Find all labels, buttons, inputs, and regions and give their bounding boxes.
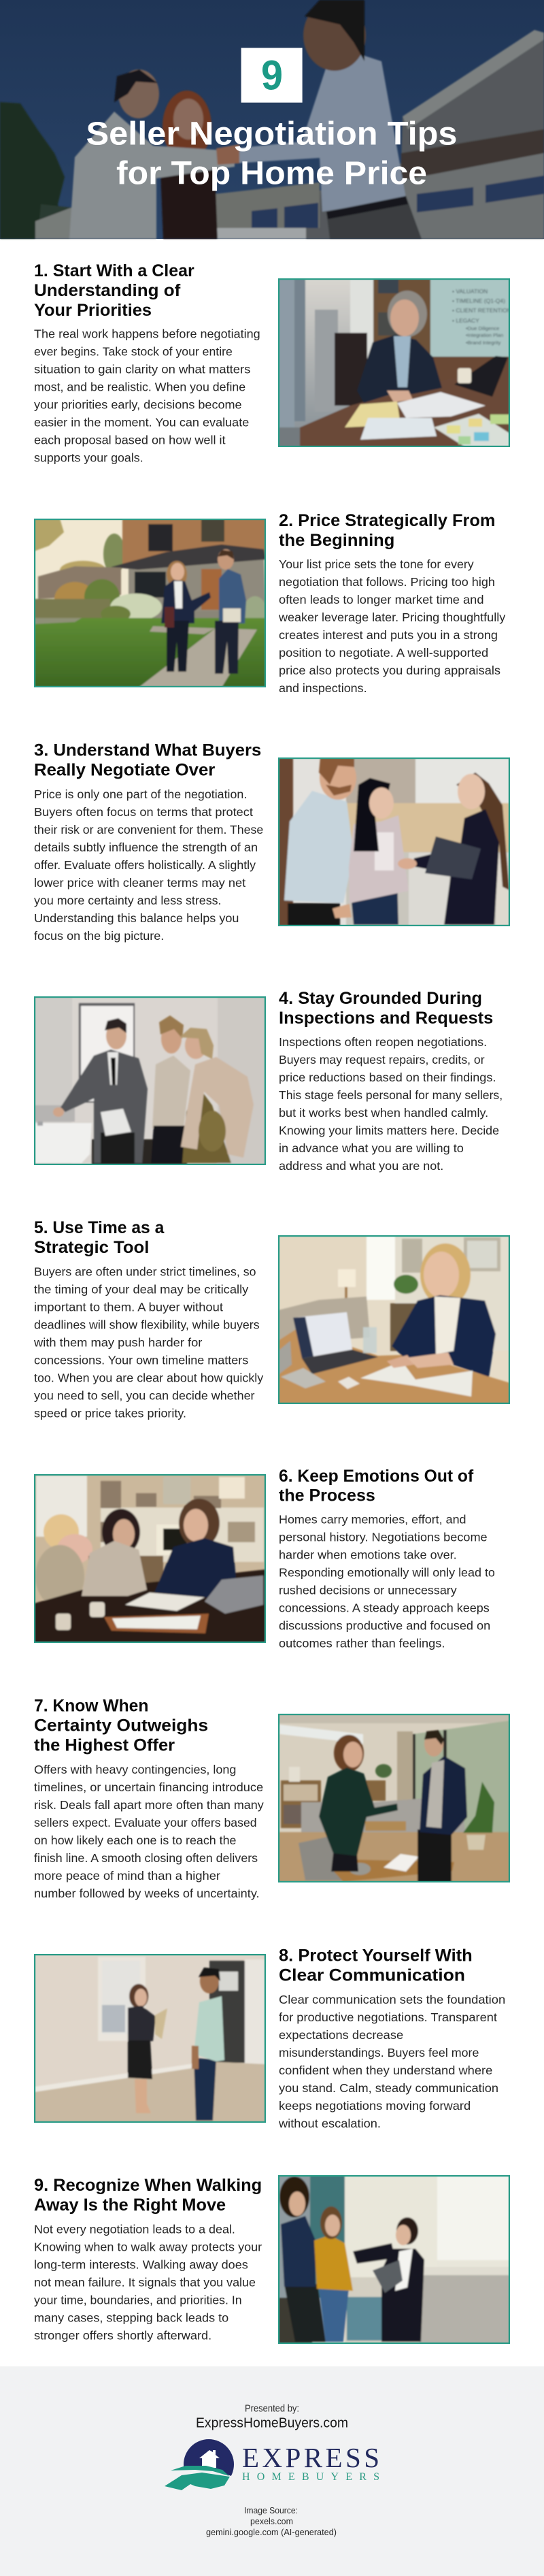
- body text: tip 5: too. When you are clear about how quickly: [34, 1371, 263, 1385]
- body text: tip 3: Buyers often focus on terms that protect: [34, 805, 253, 819]
- body text: tip 6: Responding emotionally will only lead to: [279, 1566, 495, 1580]
- body text: tip 7: risk. Deals fall apart more often than many: [34, 1798, 264, 1812]
- heading: tip 2: the Beginning: [279, 531, 394, 550]
- heading: tip 7: the Highest Offer: [34, 1735, 175, 1755]
- heading: tip 7: [34, 1696, 208, 1755]
- heading: tip 3: Really Negotiate Over: [34, 761, 216, 780]
- body text: tip 3: lower price with cleaner terms may net: [34, 876, 245, 890]
- photo: woman writing at office desk: •Brand Integrity: [466, 340, 501, 346]
- body text: tip 2: weaker leverage later. Pricing thoughtfully: [278, 610, 505, 624]
- body text: tip 2: creates interest and puts you in a strong: [279, 628, 498, 642]
- body text: tip 3: you more certainty and less stress.: [34, 894, 222, 907]
- body text: tip 3: [34, 787, 263, 943]
- body text: tip 6: rushed decisions or unnecessary: [279, 1584, 457, 1597]
- photo: woman writing at office desk: • LEGACY: [452, 317, 479, 324]
- body text: tip 8: Clear communication sets the foundation: [279, 1993, 505, 2006]
- body text: tip 4: Knowing your limits matters here. Decide: [279, 1124, 499, 1137]
- body text: tip 7: Offers with heavy contingencies, long: [34, 1763, 236, 1776]
- heading: tip 3: [34, 740, 261, 780]
- panel: tip 9: [34, 2175, 510, 2344]
- body text: tip 8: misunderstandings. Buyers feel more: [279, 2046, 479, 2059]
- body text: tip 8: you stand. Calm, steady communication: [279, 2081, 498, 2095]
- body text: tip 9: your time, boundaries, and priorities. In: [34, 2294, 242, 2307]
- body text: tip 5: you need to sell, you can decide whether: [34, 1389, 255, 1403]
- panel: tip 5: [33, 1218, 510, 1420]
- heading: tip 4: 4. Stay Grounded During: [279, 989, 482, 1008]
- heading: tip 1: 1. Start With a Clear: [34, 261, 194, 280]
- photo: woman and man talking in a living room: [278, 1714, 510, 1882]
- heading: tip 4: [279, 989, 493, 1028]
- heading: tip 6: [279, 1467, 474, 1505]
- photo: woman writing at office desk: •Integration Plan: [466, 332, 503, 338]
- body text: tip 7: timelines, or uncertain financing introduce: [34, 1780, 263, 1794]
- body text: tip 4: This stage feels personal for many sellers,: [279, 1088, 503, 1102]
- heading: tip 9: 9. Recognize When Walking: [34, 2176, 262, 2195]
- body text: tip 5: Buyers are often under strict timelines, so: [34, 1265, 256, 1279]
- number badge: 9: [261, 52, 283, 98]
- body text: tip 8: for productive negotiations. Transparent: [279, 2010, 497, 2024]
- logo: Express HomeBuyers: [163, 2439, 379, 2496]
- photo: couple shaking hands with agent in kitchen: [278, 757, 510, 926]
- body text: tip 6: discussions productive and focused on: [279, 1619, 490, 1633]
- heading: tip 5: Strategic Tool: [34, 1238, 149, 1257]
- image sources: pexels.com: [250, 2517, 293, 2526]
- photo: woman writing at office desk: • TIMELINE (Q1-Q4): [452, 297, 505, 304]
- body text: tip 8: expectations decrease: [279, 2028, 403, 2042]
- heading: tip 3: 3. Understand What Buyers: [34, 740, 261, 760]
- presented by: ExpressHomeBuyers.com: [196, 2416, 348, 2431]
- body text: tip 5: concessions. Your own timeline matters: [34, 1354, 249, 1367]
- footer panel: [0, 2366, 544, 2576]
- heading: tip 2: 2. Price Strategically From: [279, 511, 495, 530]
- body text: tip 1: [34, 327, 260, 465]
- body text: tip 9: not mean failure. It signals that you value: [34, 2276, 256, 2289]
- photo: agent with clipboard and client in empty room: [34, 1954, 266, 2123]
- body text: tip 3: Price is only one part of the negotiation.: [34, 787, 247, 801]
- body text: tip 3: focus on the big picture.: [34, 929, 164, 943]
- heading: tip 8: [279, 1946, 473, 1985]
- body text: tip 8: [278, 1993, 505, 2130]
- title: Seller Negotiation Tips: [86, 116, 457, 152]
- body text: tip 1: The real work happens before negotiating: [34, 327, 260, 341]
- body text: tip 2: [278, 557, 505, 695]
- body text: tip 7: sellers expect. Evaluate your offers based: [34, 1816, 257, 1829]
- body text: tip 5: [33, 1265, 263, 1420]
- heading: tip 4: Inspections and Requests: [279, 1009, 493, 1028]
- body text: tip 7: finish line. A smooth closing often delivers: [34, 1851, 258, 1865]
- body text: tip 7: number followed by weeks of uncertainty.: [34, 1887, 260, 1900]
- body text: tip 1: each proposal based on how well it: [34, 434, 226, 447]
- logo: Express HomeBuyers: HOMEBUYERS: [242, 2471, 379, 2483]
- hero photo: agent shaking hands with couple: [0, 0, 544, 239]
- body text: tip 8: without escalation.: [278, 2117, 381, 2130]
- body text: tip 4: Buyers may request repairs, credits, or: [279, 1053, 485, 1066]
- title: for Top Home Price: [116, 156, 427, 192]
- heading: tip 5: [34, 1218, 165, 1257]
- body text: tip 4: Inspections often reopen negotiations.: [279, 1035, 487, 1049]
- body text: tip 1: supports your goals.: [34, 451, 143, 465]
- photo: two women reviewing documents at dining table: [34, 1474, 266, 1643]
- title: [86, 116, 457, 192]
- panel: tip 1: [34, 261, 511, 465]
- photo: couple with agent holding clipboard: [278, 2175, 510, 2344]
- number badge: [241, 48, 303, 103]
- body text: tip 9: stronger offers shortly afterward.: [34, 2329, 211, 2343]
- body text: tip 2: often leads to longer market time and: [279, 593, 484, 606]
- body text: tip 9: [34, 2223, 262, 2343]
- heading: tip 1: Your Priorities: [34, 301, 152, 320]
- body text: tip 8: keeps negotiations moving forward: [279, 2099, 471, 2113]
- image sources: gemini.google.com (AI-generated): [206, 2528, 337, 2537]
- body text: tip 4: [279, 1035, 503, 1173]
- body text: tip 6: personal history. Negotiations become: [279, 1531, 488, 1544]
- body text: tip 7: more peace of mind than a higher: [34, 1869, 220, 1882]
- body text: tip 6: concessions. A steady approach keeps: [279, 1601, 490, 1615]
- panel: tip 3: [34, 740, 510, 943]
- photo: agent showing couple a bathroom: [34, 996, 266, 1165]
- photo: woman writing at office desk: • CLIENT RETENTION: [452, 307, 511, 314]
- photo: woman writing at office desk: • VALUATION: [452, 288, 488, 295]
- body text: tip 4: address and what you are not.: [279, 1159, 443, 1173]
- body text: tip 4: in advance what you are willing to: [279, 1141, 464, 1155]
- body text: tip 1: easier in the moment. You can evaluate: [34, 416, 249, 429]
- photo: woman writing at office desk: [278, 278, 511, 447]
- body text: tip 1: most, and be realistic. When you define: [34, 380, 245, 394]
- photo: agent and homeowner in front of house: [34, 519, 266, 687]
- heading: tip 6: the Process: [279, 1486, 375, 1505]
- body text: tip 3: Understanding this balance helps you: [34, 911, 239, 925]
- body text: tip 5: speed or price takes priority.: [34, 1407, 186, 1420]
- body text: tip 4: price reductions based on their findings.: [279, 1071, 496, 1084]
- body text: tip 9: long-term interests. Walking away does: [34, 2258, 248, 2272]
- body text: tip 5: deadlines will show flexibility, while buyers: [34, 1318, 260, 1332]
- body text: tip 5: the timing of your deal may be critically: [34, 1283, 249, 1297]
- body text: tip 7: on how likely each one is to reach the: [34, 1833, 236, 1847]
- body text: tip 3: details subtly influence the strength of an: [34, 841, 258, 854]
- body text: tip 2: position to negotiate. A well-supported: [279, 646, 488, 659]
- heading: tip 1: Understanding of: [34, 281, 181, 300]
- body text: tip 9: Knowing when to walk away protects your: [34, 2240, 262, 2254]
- body text: tip 7: [34, 1763, 264, 1900]
- presented by: Presented by:: [245, 2403, 299, 2414]
- body text: tip 2: and inspections.: [279, 681, 367, 695]
- body text: tip 1: your priorities early, decisions become: [34, 398, 242, 412]
- heading: tip 7: Certainty Outweighs: [34, 1716, 208, 1735]
- photo: woman writing at office desk: •Due Diligence: [466, 325, 499, 331]
- body text: tip 3: their risk or are convenient for them. These: [34, 823, 263, 836]
- panel: tip 6: [34, 1467, 495, 1650]
- heading: tip 8: Clear Communication: [279, 1966, 465, 1985]
- body text: tip 2: Your list price sets the tone for every: [279, 557, 474, 571]
- image sources: [206, 2506, 337, 2537]
- heading: tip 9: [34, 2176, 262, 2215]
- body text: tip 9: Not every negotiation leads to a deal.: [34, 2223, 235, 2236]
- panel: tip 4: [34, 989, 503, 1173]
- heading: tip 8: 8. Protect Yourself With: [279, 1946, 473, 1965]
- body text: tip 1: situation to gain clarity on what matters: [34, 363, 251, 376]
- heading: tip 2: [279, 511, 495, 550]
- panel: tip 8: [34, 1946, 505, 2130]
- heading: tip 9: Away Is the Right Move: [34, 2196, 226, 2215]
- logo: Express HomeBuyers: EXPRESS: [242, 2442, 379, 2473]
- body text: tip 3: offer. Evaluate offers holistically. A slightly: [34, 858, 256, 872]
- body text: tip 2: price also protects you during appraisals: [279, 664, 500, 677]
- body text: tip 6: harder when emotions take over.: [279, 1548, 457, 1562]
- body text: tip 5: important to them. A buyer without: [34, 1301, 223, 1314]
- body text: tip 6: outcomes rather than feelings.: [279, 1637, 445, 1650]
- body text: tip 5: with them may push harder for: [33, 1336, 203, 1350]
- panel: tip 2: [34, 511, 505, 695]
- presented by: [196, 2403, 348, 2431]
- heading: tip 7: 7. Know When: [34, 1696, 148, 1715]
- image sources: Image Source:: [244, 2506, 298, 2515]
- body text: tip 8: confident when they understand where: [279, 2064, 492, 2077]
- body text: tip 6: Homes carry memories, effort, and: [279, 1513, 466, 1527]
- body text: tip 1: ever begins. Take stock of your entire: [34, 345, 233, 359]
- photo: woman working at table with laptop and binder: [278, 1235, 510, 1404]
- heading: tip 1: [34, 261, 194, 320]
- heading: tip 5: 5. Use Time as a: [34, 1218, 165, 1237]
- body text: tip 4: but it works best when handled calmly.: [279, 1106, 488, 1120]
- heading: tip 6: 6. Keep Emotions Out of: [279, 1467, 474, 1486]
- body text: tip 2: negotiation that follows. Pricing too high: [279, 575, 495, 589]
- body text: tip 6: [279, 1513, 495, 1650]
- panel: tip 7: [34, 1696, 510, 1900]
- hero banner: [0, 0, 544, 239]
- body text: tip 9: many cases, stepping back leads to: [34, 2311, 228, 2325]
- icon: circle with house and green swoosh: [163, 2439, 235, 2496]
